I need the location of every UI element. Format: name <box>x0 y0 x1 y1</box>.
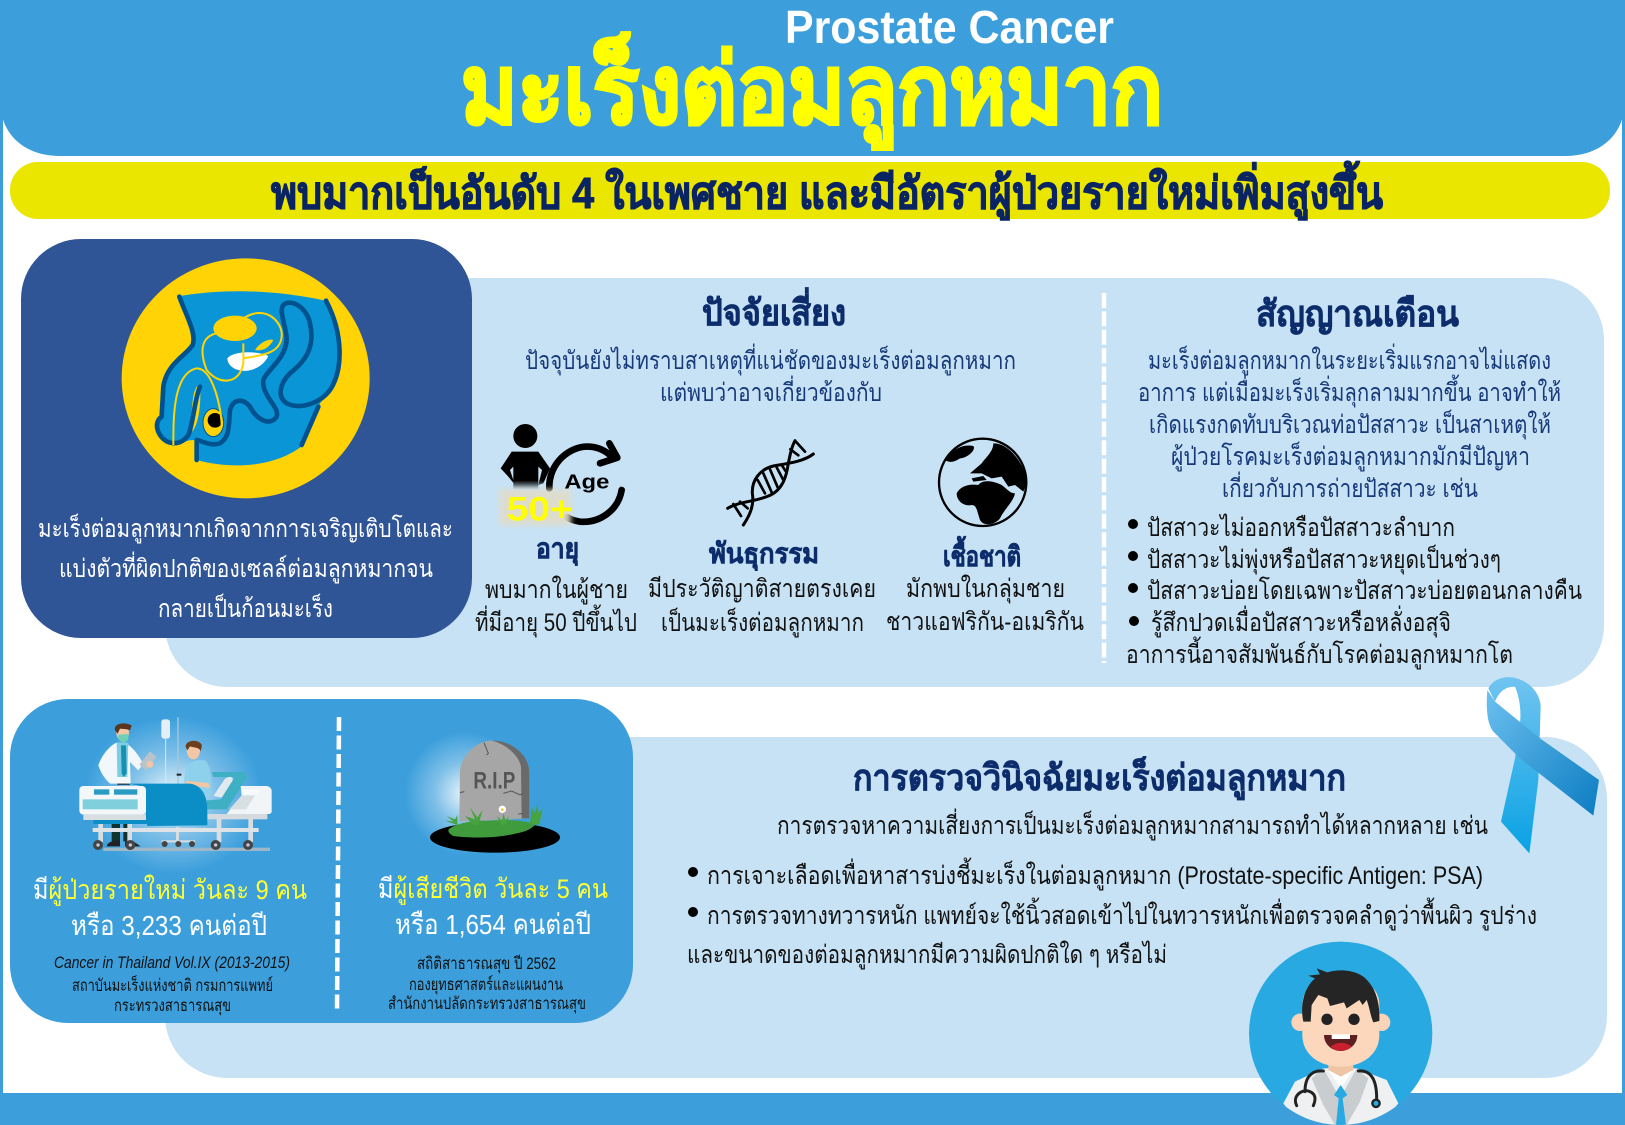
source: new patients: กระทรวงสาธารณสุข <box>114 996 231 1016</box>
statistic: deaths: หรือ 1,654 คนต่อปี <box>395 909 591 940</box>
source: new patients <box>54 953 290 1016</box>
icon: age 50+ <box>499 424 622 529</box>
title: Thai main heading: มะเร็งต่อมลูกหมาก <box>461 32 1163 150</box>
description text: กลายเป็นก้อนมะเร็ง <box>158 593 333 623</box>
panel: statistics <box>10 699 633 1023</box>
risk factor: genetics: มีประวัติญาติสายตรงเคย <box>648 575 876 603</box>
risk factors intro: ปัจจุบันยังไม่ทราบสาเหตุที่แน่ชัดของมะเร็งต่อมลูกหมาก <box>525 343 1016 376</box>
warning signs intro: ผู้ป่วยโรคมะเร็งต่อมลูกหมากมักมีปัญหา <box>1171 441 1530 472</box>
risk factor: age: ที่มีอายุ 50 ปีขึ้นไป <box>475 604 637 638</box>
risk factors intro <box>525 343 1016 407</box>
illustration: doctor and patient at hospital bed <box>79 717 272 874</box>
icon: globe <box>939 439 1027 526</box>
diagnosis intro: การตรวจหาความเสี่ยงการเป็นมะเร็งต่อมลูกหมากสามารถทำได้หลากหลาย เช่น <box>777 808 1488 841</box>
risk factor: ethnicity: เชื้อชาติ <box>943 535 1021 572</box>
description text <box>38 513 453 623</box>
panel: diagnosis background <box>165 737 1607 1078</box>
header band <box>0 0 1625 156</box>
risk factor: genetics: เป็นมะเร็งต่อมลูกหมาก <box>661 607 864 638</box>
source: deaths: กองยุทธศาสตร์และแผนงาน <box>409 975 563 995</box>
risk factor: ethnicity <box>886 535 1084 636</box>
subtitle text: พบมากเป็นอันดับ 4 ในเพศชาย และมีอัตราผู้ป่วยรายใหม่เพิ่มสูงขึ้น <box>271 160 1383 220</box>
illustration: gravestone RIP: R.I.P <box>473 768 515 795</box>
statistic: new patients: หรือ 3,233 คนต่อปี <box>71 910 267 941</box>
risk factors intro: แต่พบว่าอาจเกี่ยวข้องกับ <box>660 375 882 407</box>
risk factor: ethnicity: มักพบในกลุ่มชาย <box>906 574 1065 604</box>
icon: DNA helix <box>728 441 813 525</box>
warning signs intro: เกี่ยวกับการถ่ายปัสสาวะ เช่น <box>1222 471 1478 503</box>
icon: awareness ribbon <box>1487 677 1599 853</box>
icon: age 50+: Age <box>564 470 609 493</box>
panel: what is prostate cancer <box>21 239 472 638</box>
footer band <box>0 1093 1625 1125</box>
source: deaths <box>388 954 586 1014</box>
title: Prostate Cancer: Prostate Cancer <box>785 1 1114 53</box>
risk factor: age <box>475 533 637 638</box>
warning signs bullet list: รู้สึกปวดเมื่อปัสสาวะหรือหลั่งอสุจิ <box>1151 605 1451 638</box>
description text: แบ่งตัวที่ผิดปกติของเซลล์ต่อมลูกหมากจน <box>59 551 433 584</box>
source: deaths: สถิติสาธารณสุข ปี 2562 <box>417 954 556 974</box>
statistic: new patients: มีผู้ป่วยรายใหม่ วันละ 9 คน <box>33 874 307 906</box>
warning signs bullet list: ปัสสาวะไม่พุ่งหรือปัสสาวะหยุดเป็นช่วงๆ <box>1147 544 1501 575</box>
heading: warning signs: สัญญาณเตือน <box>1256 293 1459 335</box>
warning signs intro: เกิดแรงกดทับบริเวณท่อปัสสาวะ เป็นสาเหตุให้ <box>1149 409 1551 440</box>
statistic: new patients <box>33 874 307 941</box>
panel: risk factors and warning signs background <box>165 278 1604 687</box>
diagnosis bullet list <box>687 857 1537 970</box>
icon: smiling doctor <box>1249 942 1432 1125</box>
risk factor: ethnicity: ชาวแอฟริกัน-อเมริกัน <box>886 608 1084 636</box>
warning signs bullet list: ปัสสาวะไม่ออกหรือปัสสาวะลำบาก <box>1147 513 1455 542</box>
risk factor: age: อายุ <box>536 533 579 566</box>
source: new patients: Cancer in Thailand Vol.IX (2013-2015) <box>54 953 290 972</box>
risk factor: genetics: พันธุกรรม <box>709 538 819 571</box>
diagnosis bullet list: การเจาะเลือดเพื่อหาสารบ่งชี้มะเร็งในต่อมลูกหมาก (Prostate-specific Antigen: PSA) <box>707 857 1483 891</box>
heading: risk factors: ปัจจัยเสี่ยง <box>702 287 846 333</box>
risk factor: genetics <box>648 538 876 638</box>
heading: diagnosis: การตรวจวินิจฉัยมะเร็งต่อมลูกหมาก <box>853 755 1346 801</box>
source: deaths: สำนักงานปลัดกระทรวงสาธารณสุข <box>388 994 586 1014</box>
source: new patients: สถาบันมะเร็งแห่งชาติ กรมการแพทย์ <box>72 974 273 995</box>
statistic: deaths: มีผู้เสียชีวิต วันละ 5 คน <box>378 874 608 905</box>
icon: age 50+: 50+ <box>507 491 573 529</box>
warning signs intro <box>1138 343 1561 503</box>
warning signs bullet list <box>1126 513 1582 670</box>
risk factor: age: พบมากในผู้ชาย <box>485 575 628 605</box>
diagnosis bullet list: และขนาดของต่อมลูกหมากมีความผิดปกติใด ๆ หรือไม่ <box>687 940 1167 970</box>
illustration: gravestone RIP <box>405 732 560 855</box>
warning signs bullet list: อาการนี้อาจสัมพันธ์กับโรคต่อมลูกหมากโต <box>1126 636 1513 670</box>
statistic: deaths <box>378 874 608 940</box>
description text: มะเร็งต่อมลูกหมากเกิดจากการเจริญเติบโตและ <box>38 513 453 544</box>
icon: prostate anatomy <box>122 258 370 498</box>
subtitle banner <box>10 160 1610 220</box>
